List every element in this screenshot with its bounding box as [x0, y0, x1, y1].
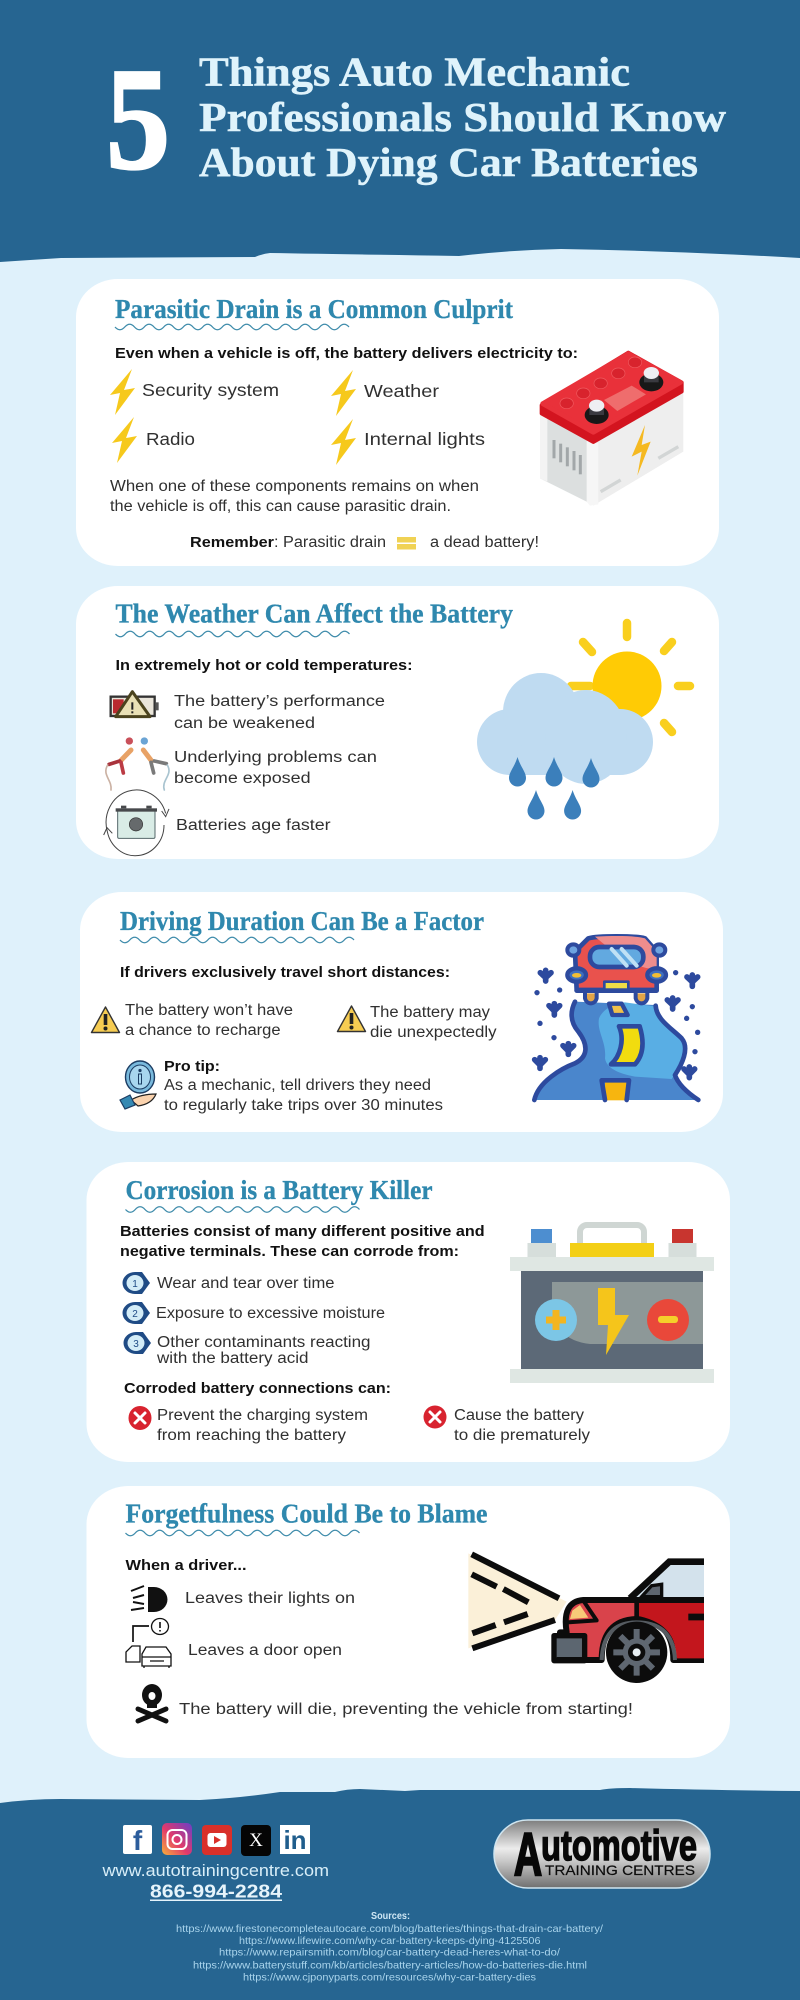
label: weather: Weather	[364, 381, 439, 401]
intro text	[120, 1223, 485, 1260]
icon: weak battery warning	[111, 692, 159, 717]
icon: skull and crossbones	[138, 1684, 166, 1721]
text: prematurely: Cause the battery	[454, 1407, 584, 1424]
icon: number 2: 2	[132, 1309, 138, 1320]
icon: ageing battery	[104, 790, 169, 856]
icon: red top battery	[540, 352, 683, 506]
logo: automotive training centres: A	[514, 1821, 542, 1888]
panel: weather	[76, 586, 719, 859]
icon: x one	[128, 1406, 152, 1430]
sources	[176, 1911, 603, 1984]
body text	[110, 478, 479, 515]
subheading: corroded connections: Corroded battery connections can:	[124, 1380, 391, 1397]
text: performance	[174, 693, 385, 732]
label: security system: Security system	[142, 380, 279, 400]
icon: number 2	[122, 1302, 150, 1324]
text: lights on: Leaves their lights on	[185, 1590, 355, 1607]
text: prematurely: to die prematurely	[454, 1427, 590, 1444]
sources: https://www.firestonecompleteautocare.com/blog/batteries/things-that-drain-car-battery/	[176, 1923, 603, 1935]
heading: corrosion: Corrosion is a Battery Killer	[126, 1174, 432, 1205]
panel: corrosion	[86, 1162, 730, 1462]
phone number: 866-994-2284	[150, 1881, 283, 1902]
website: www.autotrainingcentre.com	[101, 1861, 329, 1880]
text: performance: can be weakened	[174, 715, 315, 732]
pro tip: As a mechanic, tell drivers they need	[164, 1077, 431, 1094]
logo: automotive training centres	[494, 1820, 710, 1888]
text: unexpectedly	[370, 1004, 497, 1041]
heading: weather: The Weather Can Affect the Battery	[116, 598, 513, 629]
icon: number 1	[122, 1272, 150, 1294]
icon: x	[241, 1825, 271, 1856]
pro tip: to regularly take trips over 30 minutes	[164, 1097, 443, 1114]
title number 5: 5	[106, 38, 170, 200]
header banner	[0, 0, 800, 262]
text: moisture: Exposure to excessive moisture	[156, 1305, 385, 1322]
icon: number 3	[124, 1332, 151, 1354]
heading: forgetfulness: Forgetfulness Could Be to Blame	[126, 1498, 488, 1529]
icon: info in hand	[120, 1061, 156, 1109]
intro text: If drivers exclusively travel short distances:	[120, 964, 450, 981]
icon: instagram	[162, 1823, 192, 1855]
icon: youtube	[202, 1825, 232, 1855]
panel: parasitic drain	[76, 279, 719, 566]
label: internal lights: Internal lights	[364, 429, 485, 449]
title: About Dying Car Batteries	[199, 139, 698, 185]
icon: bolt internal lights	[331, 419, 356, 465]
sources: https://www.cjponyparts.com/resources/why-car-battery-dies	[243, 1972, 536, 1984]
intro text: negative terminals. These can corrode from:	[120, 1243, 459, 1260]
icon: x: X	[249, 1830, 263, 1851]
text: wear: Wear and tear over time	[157, 1275, 334, 1292]
text: prematurely	[454, 1407, 590, 1444]
text: recharge: a chance to recharge	[125, 1022, 281, 1039]
logo: automotive training centres: utomotive	[541, 1822, 697, 1870]
remember line: Remember	[190, 534, 274, 551]
text: underlying problems: Underlying problems can	[174, 749, 377, 766]
social icons	[123, 1823, 310, 1856]
icon: car with headlights	[468, 1553, 708, 1683]
pro tip	[164, 1058, 443, 1114]
text: contaminants: Other contaminants reacting	[157, 1334, 370, 1351]
icon: bolt weather	[331, 370, 356, 416]
panel: driving duration	[80, 892, 723, 1132]
sources: https://www.lifewire.com/why-car-battery-keeps-dying-4125506	[239, 1935, 541, 1947]
text: charging system	[157, 1407, 368, 1444]
title	[199, 48, 726, 185]
icon: warning one	[92, 1007, 120, 1032]
text: underlying problems	[174, 749, 377, 787]
text: underlying problems: become exposed	[174, 770, 311, 787]
intro text: Even when a vehicle is off, the battery delivers electricity to:	[115, 345, 578, 362]
text: contaminants	[156, 1334, 370, 1367]
icon: warning two	[338, 1006, 366, 1032]
sources: https://www.repairsmith.com/blog/car-battery-dead-heres-what-to-do/	[219, 1947, 560, 1959]
text: charging system: Prevent the charging system	[157, 1407, 368, 1424]
label: radio: Radio	[146, 429, 195, 449]
icon: x two	[424, 1406, 446, 1428]
remember line	[190, 534, 539, 551]
icon: open door alert	[126, 1618, 171, 1668]
title: Professionals Should Know	[199, 94, 726, 140]
text: age faster: Batteries age faster	[176, 817, 331, 834]
remember line: a dead battery!	[430, 534, 539, 551]
icon: jumper clamps	[106, 737, 169, 790]
icon: facebook: f	[133, 1825, 143, 1856]
intro text: Batteries consist of many different positive and	[120, 1223, 485, 1240]
icon: sun and rain cloud	[477, 623, 690, 820]
footer banner	[0, 1788, 800, 2000]
icon: bolt radio	[112, 417, 137, 463]
text: contaminants: with the battery acid	[156, 1350, 308, 1367]
body text: the vehicle is off, this can cause parasitic drain.	[110, 498, 451, 515]
title: Things Auto Mechanic	[199, 48, 630, 94]
text: unexpectedly: die unexpectedly	[370, 1024, 497, 1041]
icon: linkedin: in	[283, 1825, 307, 1855]
heading: parasitic drain: Parasitic Drain is a Common Culprit	[115, 293, 514, 324]
icon: flat battery	[510, 1225, 714, 1383]
heading: driving: Driving Duration Can Be a Factor	[120, 905, 484, 936]
text: performance: The battery’s performance	[174, 693, 385, 710]
pro tip: Pro tip:	[164, 1058, 220, 1075]
icon: number 1: 1	[132, 1279, 138, 1290]
icon: bolt security	[110, 369, 135, 415]
text: recharge	[125, 1002, 293, 1039]
text: recharge: The battery won’t have	[125, 1002, 293, 1019]
icon: headlight	[131, 1586, 167, 1612]
icon: number 3: 3	[133, 1339, 139, 1350]
text: door open: Leaves a door open	[188, 1642, 342, 1659]
logo: automotive training centres: TRAINING CENTRES	[545, 1862, 695, 1878]
body text: When one of these components remains on when	[110, 478, 479, 495]
text: charging system: from reaching the battery	[157, 1427, 346, 1444]
sources: Sources:	[371, 1911, 410, 1922]
panel: forgetfulness	[86, 1486, 730, 1758]
intro text: When a driver...	[126, 1557, 246, 1574]
text: unexpectedly: The battery may	[370, 1004, 490, 1021]
sources: https://www.batterystuff.com/kb/articles/battery-articles/how-do-batteries-die.html	[193, 1960, 587, 1972]
icon: car on road	[534, 936, 700, 1100]
text: battery will die: The battery will die, preventing the vehicle from starting!	[179, 1701, 633, 1718]
icon: facebook	[123, 1825, 152, 1856]
intro text: In extremely hot or cold temperatures:	[116, 657, 412, 674]
remember line: : Parasitic drain	[274, 534, 386, 551]
